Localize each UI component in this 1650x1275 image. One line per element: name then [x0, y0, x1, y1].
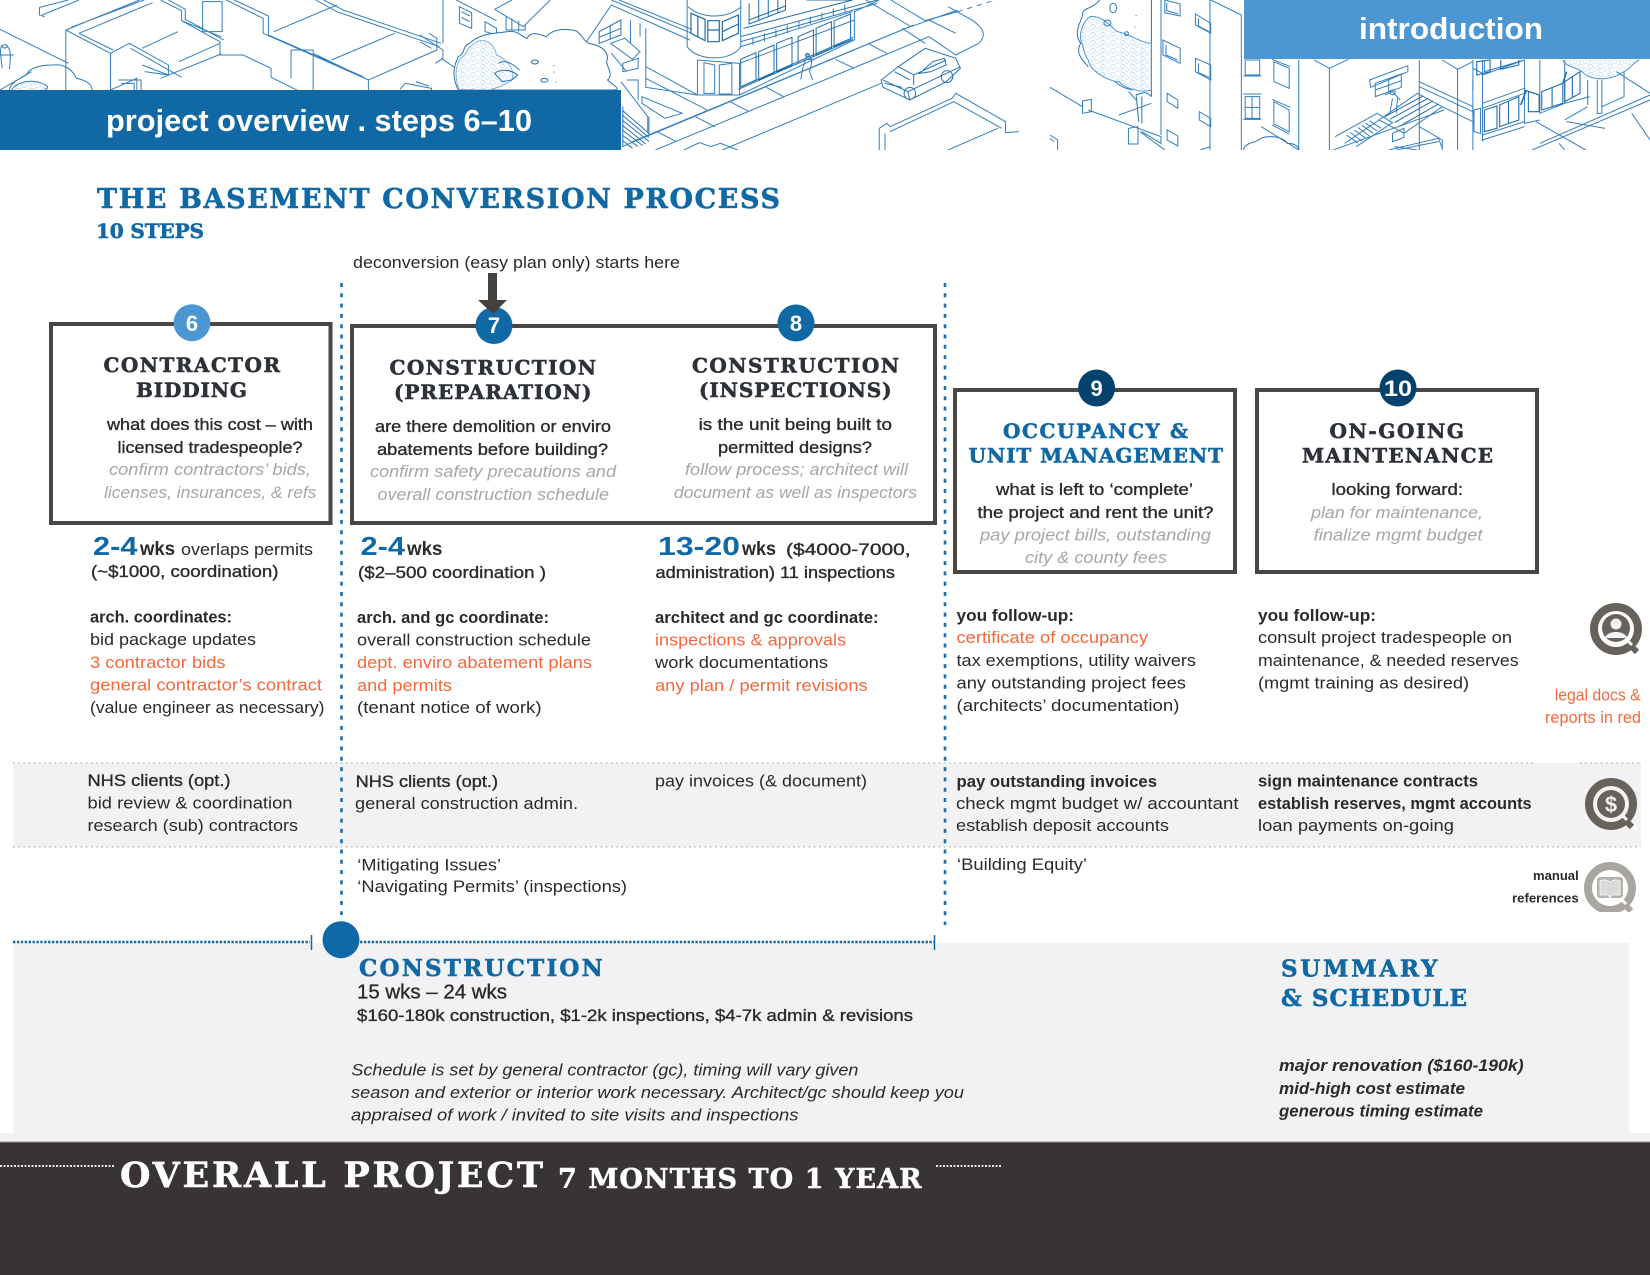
step 7 question: are there demolition or enviro	[375, 417, 611, 436]
task list: step 8: architect and gc coordinate:	[655, 608, 879, 627]
financial row: step 7: NHS clients (opt.)	[356, 772, 498, 791]
step 9 question: pay project bills, outstanding	[979, 526, 1212, 545]
step 6 question	[104, 415, 317, 502]
step 6 heading: CONTRACTOR	[104, 353, 280, 377]
step 9 heading: OCCUPANCY &	[1003, 419, 1188, 443]
construction schedule note: season and exterior or interior work necessary. Architect/gc should keep you	[351, 1083, 965, 1102]
illustration left: rooftops	[0, 0, 442, 90]
summary estimates	[1278, 1056, 1524, 1121]
financial row: step 6: research (sub) contractors	[88, 816, 298, 835]
task list: step 6: general contractor’s contract	[90, 676, 322, 695]
step 8 question: is the unit being built to	[699, 415, 892, 434]
financial row: step 10	[1258, 772, 1532, 835]
step 10 number badge	[1380, 370, 1416, 406]
legend: manual references: manual	[1533, 868, 1579, 883]
duration: step 8: wks	[741, 539, 776, 560]
construction schedule note	[351, 1060, 965, 1125]
financial row: step 8: pay invoices (& document)	[655, 772, 867, 791]
step 9 question: what is left to ‘complete’	[995, 480, 1193, 499]
title: 10 STEPS	[96, 219, 204, 243]
construction summary	[357, 955, 913, 1025]
title	[96, 184, 780, 243]
summary and schedule heading: & SCHEDULE	[1281, 985, 1467, 1012]
manual references: step 7: ‘Navigating Permits’ (inspections)	[357, 877, 627, 896]
step 8 number badge: 8	[790, 311, 802, 336]
task list: step 7: and permits	[357, 676, 452, 695]
task list: step 6: arch. coordinates:	[90, 608, 232, 627]
step 8 question	[674, 415, 918, 502]
step 7 question: overall construction schedule	[378, 485, 609, 504]
step 6 number badge: 6	[186, 311, 198, 336]
legend: legal docs in red: legal docs &	[1555, 686, 1641, 705]
step 8 question: document as well as inspectors	[674, 483, 918, 502]
icon: dollar search: $	[1605, 792, 1617, 817]
illustration right: tree, towers, balconies and bay windows	[1050, 0, 1650, 150]
task list: step 9: you follow-up:	[956, 606, 1074, 625]
construction schedule note: Schedule is set by general contractor (gc), timing will vary given	[351, 1060, 858, 1079]
summary and schedule heading: SUMMARY	[1281, 956, 1438, 983]
step 6 number badge	[174, 304, 210, 341]
step 10 heading	[1302, 419, 1493, 468]
section banner: project overview: project overview . steps 6–10	[106, 103, 532, 138]
icon: book search	[1588, 866, 1636, 914]
step 6 question: confirm contractors’ bids,	[109, 460, 311, 479]
construction summary: $160-180k construction, $1-2k inspections, $4-7k admin & revisions	[357, 1006, 913, 1025]
step 7 question: abatements before building?	[377, 440, 608, 459]
financial row: step 9: establish deposit accounts	[956, 816, 1169, 835]
illustration center: corner building, tree, street and car	[420, 0, 1019, 150]
header illustration: isometric street of buildings	[0, 0, 1650, 150]
legend: legal docs in red	[1545, 686, 1641, 727]
task list: step 6: 3 contractor bids	[90, 653, 226, 672]
financial row: step 6: bid review & coordination	[88, 794, 292, 813]
step 6 question: what does this cost – with	[106, 415, 313, 434]
step 10 question: looking forward:	[1332, 480, 1463, 499]
task list: step 7: (tenant notice of work)	[357, 698, 542, 717]
task list: step 6: (value engineer as necessary)	[90, 698, 324, 717]
financial row: step 10: establish reserves, mgmt accounts	[1258, 794, 1532, 813]
step 7 question: confirm safety precautions and	[370, 462, 617, 481]
task list: step 6	[90, 608, 324, 717]
financial row: step 10: sign maintenance contracts	[1258, 772, 1478, 791]
step 7 number badge	[476, 307, 512, 344]
step 6 question: licensed tradespeople?	[118, 438, 302, 457]
financial row: step 10: loan payments on-going	[1258, 816, 1454, 835]
legend: legal docs in red: reports in red	[1545, 708, 1641, 727]
panel: step 9 occupancy and unit management	[955, 370, 1235, 572]
manual references: step 9: ‘Building Equity’	[957, 855, 1087, 874]
task list: step 8: any plan / permit revisions	[655, 676, 868, 695]
step 7 number badge: 7	[488, 313, 500, 338]
step 6 heading: BIDDING	[136, 378, 247, 402]
summary estimates: major renovation ($160-190k)	[1279, 1056, 1524, 1075]
step 10 question: finalize mgmt budget	[1314, 526, 1484, 545]
construction summary: CONSTRUCTION	[359, 955, 603, 982]
task list: step 8: work documentations	[654, 653, 828, 672]
duration: step 6: 2-4	[93, 531, 138, 561]
timeline: construction span	[13, 921, 934, 958]
step 10 number badge: 10	[1384, 376, 1412, 401]
duration: step 6: (~$1000, coordination)	[91, 562, 278, 581]
step 10 heading: ON-GOING	[1330, 419, 1464, 443]
step 6 heading	[104, 353, 280, 402]
duration: step 6	[91, 531, 313, 581]
step 8 question: permitted designs?	[718, 438, 872, 457]
task list: step 8	[654, 608, 879, 695]
grey band: financial row	[13, 763, 1641, 847]
duration: step 8: administration) 11 inspections	[656, 563, 895, 582]
section tab: introduction	[1244, 0, 1650, 59]
step 8 question: follow process; architect will	[685, 460, 909, 479]
task list: step 9	[956, 606, 1196, 715]
task list: step 9: (architects’ documentation)	[956, 696, 1180, 715]
step 7 question	[370, 417, 617, 504]
financial row: step 7	[355, 772, 578, 813]
task list: step 7: overall construction schedule	[357, 631, 591, 650]
step 7 heading: CONSTRUCTION	[390, 356, 596, 380]
panel: step 10 on-going maintenance	[1257, 370, 1537, 572]
section tab: introduction: introduction	[1359, 11, 1543, 46]
construction schedule note: appraised of work / invited to site visits and inspections	[351, 1106, 799, 1125]
duration: step 7: 2-4	[360, 531, 406, 561]
step 9 number badge	[1078, 370, 1115, 406]
task list: step 10: (mgmt training as desired)	[1258, 674, 1469, 693]
task list: step 10: maintenance, & needed reserves	[1258, 651, 1519, 670]
duration: step 7	[358, 531, 546, 582]
arrow: deconversion entry	[478, 273, 507, 314]
step 8 heading	[692, 354, 899, 402]
task list: step 9: certificate of occupancy	[956, 628, 1149, 647]
task list: step 6: bid package updates	[90, 630, 256, 649]
step 8 heading: (INSPECTIONS)	[699, 378, 892, 402]
duration: step 8: ($4000-7000,	[786, 540, 911, 559]
task list: step 8: inspections & approvals	[655, 631, 846, 650]
summary estimates: generous timing estimate	[1278, 1102, 1483, 1121]
financial row: step 6	[88, 771, 298, 835]
financial row: step 9	[956, 772, 1239, 835]
legend: manual references: references	[1512, 891, 1579, 906]
step 9 number badge: 9	[1090, 376, 1103, 401]
step 6 question: licenses, insurances, & refs	[104, 483, 317, 502]
annotation: deconversion starts here: deconversion (easy plan only) starts here	[353, 253, 680, 272]
step 9 heading	[968, 419, 1223, 468]
task list: step 9: any outstanding project fees	[956, 674, 1186, 693]
step 10 question: plan for maintenance,	[1310, 503, 1483, 522]
summary estimates: mid-high cost estimate	[1279, 1079, 1465, 1098]
task list: step 10: you follow-up:	[1258, 606, 1376, 625]
footer heading: OVERALL PROJECT	[120, 1155, 543, 1196]
task list: step 10	[1258, 606, 1519, 693]
financial row: step 7: general construction admin.	[355, 794, 578, 813]
duration: step 6: wks	[139, 539, 175, 560]
grey panel: construction and summary	[0, 943, 1650, 1142]
financial row: step 6: NHS clients (opt.)	[88, 771, 230, 790]
step 9 question: the project and rent the unit?	[978, 503, 1214, 522]
task list: step 9: tax exemptions, utility waivers	[956, 651, 1196, 670]
step 9 question	[978, 480, 1214, 567]
summary and schedule heading	[1281, 956, 1467, 1012]
task list: step 7	[357, 608, 592, 717]
task list: step 7: arch. and gc coordinate:	[357, 608, 549, 627]
duration: step 7: wks	[406, 539, 442, 560]
step 10 heading: MAINTENANCE	[1302, 444, 1493, 468]
duration: step 8	[656, 531, 911, 582]
footer band: overall project	[0, 1142, 1650, 1275]
duration: step 7: ($2–500 coordination )	[358, 563, 546, 582]
step 8 number badge	[778, 304, 814, 342]
step 9 heading: UNIT MANAGEMENT	[968, 444, 1223, 468]
step 9 question: city & county fees	[1025, 548, 1168, 567]
financial row: step 9: check mgmt budget w/ accountant	[956, 794, 1239, 813]
icon: dollar search	[1589, 782, 1637, 830]
title: THE BASEMENT CONVERSION PROCESS	[97, 184, 780, 215]
step 7 heading	[390, 356, 596, 404]
step 7 heading: (PREPARATION)	[394, 380, 592, 404]
step 8 heading: CONSTRUCTION	[692, 354, 899, 378]
manual references: step 7	[357, 856, 627, 896]
footer duration: 7 MONTHS TO 1 YEAR	[558, 1164, 922, 1195]
step 10 question	[1310, 480, 1484, 545]
financial row: step 9: pay outstanding invoices	[956, 772, 1157, 791]
section banner: project overview	[0, 90, 621, 150]
panel: step 6 contractor bidding	[51, 304, 330, 523]
panel: steps 7 and 8 construction	[352, 273, 935, 523]
manual references: step 7: ‘Mitigating Issues’	[357, 856, 501, 875]
construction summary: 15 wks – 24 wks	[357, 982, 507, 1004]
icon: person search	[1594, 607, 1642, 655]
duration: step 8: 13-20	[658, 531, 740, 561]
duration: step 6: overlaps permits	[181, 540, 313, 559]
legend: manual references	[1512, 868, 1579, 906]
task list: step 10: consult project tradespeople on	[1258, 628, 1512, 647]
task list: step 7: dept. enviro abatement plans	[357, 653, 592, 672]
